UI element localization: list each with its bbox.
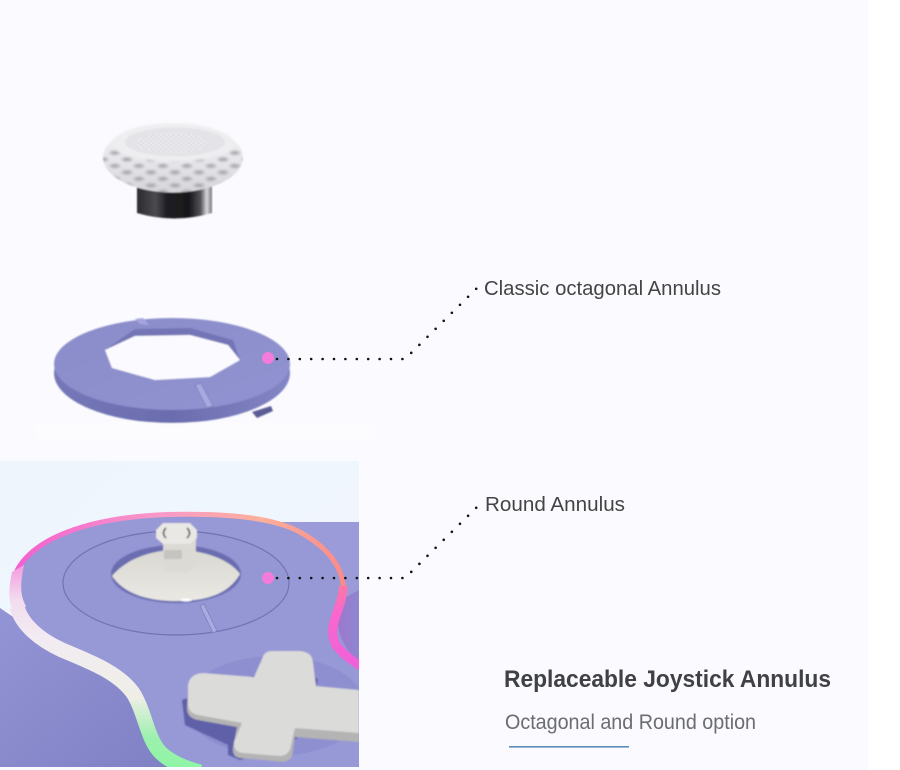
title: Replaceable Joystick Annulus — [504, 666, 831, 693]
ring ridge marker — [200, 604, 217, 633]
ring ridge top — [135, 318, 149, 325]
icon: joystick cap — [100, 122, 246, 218]
joystick socket — [111, 545, 241, 603]
callout: round annulus leader — [262, 507, 477, 584]
panel background — [0, 461, 359, 616]
light strip top — [14, 514, 344, 588]
panel: octagonal annulus ring — [40, 318, 370, 438]
textured cap — [100, 122, 246, 194]
label: classic octagonal annulus: Classic octagonal Annulus — [484, 278, 721, 300]
dot marker — [262, 352, 274, 364]
ring soft floor halo — [40, 424, 370, 438]
controller top plate — [15, 513, 359, 767]
light strip left taper — [9, 565, 26, 608]
ring ridge bottom — [195, 383, 213, 408]
metal stem — [137, 186, 212, 218]
ring clip tab — [252, 406, 273, 418]
controller right lobe — [338, 590, 359, 660]
d-pad shadow recess — [182, 676, 318, 760]
d-pad top face — [188, 651, 359, 756]
subtitle: Octagonal and Round option — [505, 711, 756, 734]
infographic canvas — [0, 122, 830, 767]
callout: octagonal annulus leader — [262, 288, 477, 364]
octagonal opening — [105, 335, 240, 380]
controller lower body — [0, 608, 185, 767]
label: round annulus: Round Annulus — [485, 494, 625, 516]
light strip right — [333, 586, 361, 666]
panel: controller close-up — [0, 461, 365, 770]
ring side wall — [54, 323, 290, 423]
ring top surface — [54, 318, 290, 410]
dotted leader line — [277, 288, 477, 359]
d-pad well — [200, 657, 359, 754]
d-pad side wall — [186, 696, 359, 762]
dot marker — [262, 572, 274, 584]
d-pad button — [182, 651, 359, 762]
accent underline — [509, 746, 629, 748]
ring inner notch wall — [105, 328, 240, 360]
controller upper body — [282, 522, 359, 597]
light strip left — [17, 607, 200, 770]
dotted leader line — [277, 507, 477, 578]
round annulus ring — [63, 531, 289, 635]
joystick shaft — [155, 522, 198, 560]
